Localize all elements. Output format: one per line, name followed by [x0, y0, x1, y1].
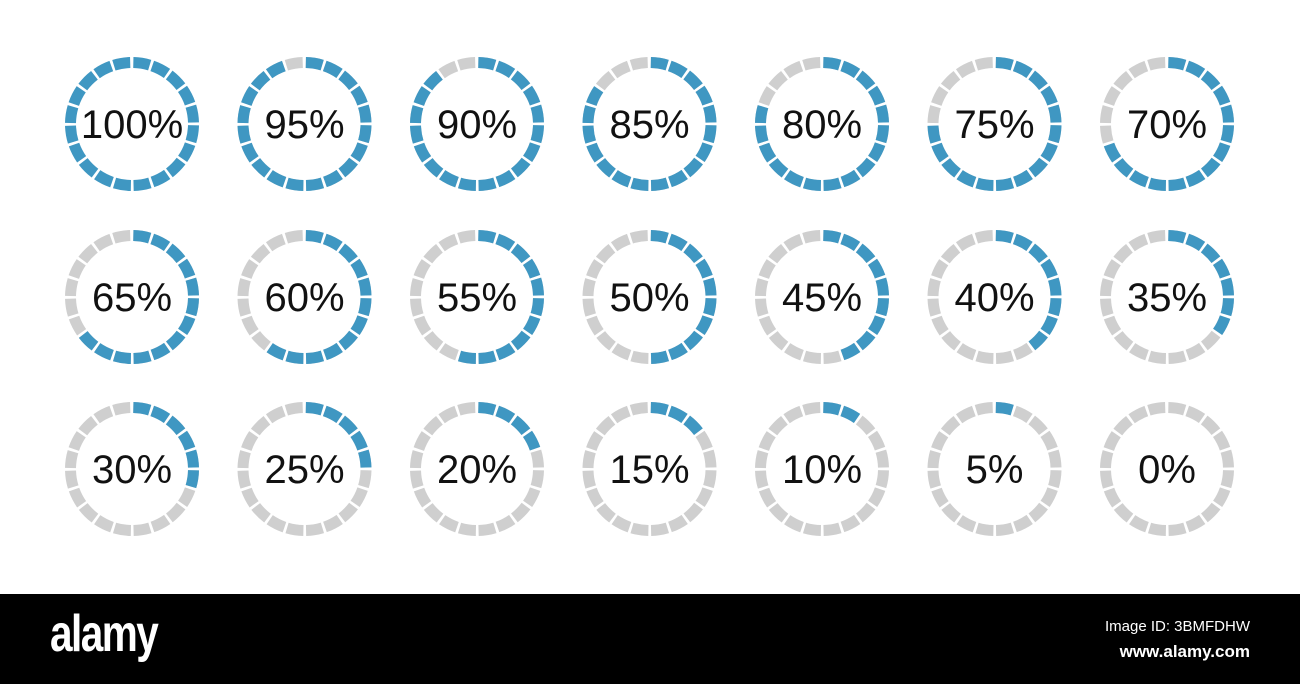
ring: 95%	[243, 62, 366, 186]
ring: 25%: 25%	[264, 448, 345, 492]
ring: 90%	[416, 62, 538, 186]
logo: alamy: alamy	[50, 605, 157, 663]
ring: 50%: 50%	[609, 276, 690, 320]
ring: 85%	[588, 62, 711, 186]
ring: 0%	[1106, 408, 1228, 530]
ring: 20%	[416, 408, 538, 530]
ring: 70%: 70%	[1127, 103, 1207, 147]
ring: 95%: 95%	[264, 103, 345, 147]
ring: 55%	[416, 236, 538, 358]
ring: 10%: 10%	[782, 448, 862, 492]
ring: 45%: 45%	[782, 276, 862, 320]
ring: 80%: 80%	[782, 103, 862, 147]
ring: 85%: 85%	[609, 103, 690, 147]
ring: 65%: 65%	[92, 276, 172, 320]
ring: 40%: 40%	[954, 276, 1035, 320]
ring: 15%	[588, 408, 711, 530]
ring: 45%	[760, 236, 884, 358]
ring: 35%	[1106, 236, 1228, 358]
ring: 70%	[1106, 62, 1228, 186]
ring: 60%: 60%	[264, 276, 345, 320]
ring: 80%	[760, 62, 884, 186]
ring: 30%: 30%	[92, 448, 172, 492]
footer bar	[0, 594, 1300, 684]
ring: 75%: 75%	[954, 103, 1035, 147]
ring: 25%	[243, 408, 366, 530]
ring: 65%	[70, 236, 194, 358]
ring: 100%	[70, 62, 194, 186]
ring: 55%: 55%	[437, 276, 517, 320]
text: image id: Image ID: 3BMFDHW	[1105, 618, 1250, 635]
text: website: www.alamy.com	[1120, 642, 1250, 661]
ring: 10%	[760, 408, 884, 530]
ring: 40%	[933, 236, 1056, 358]
ring: 5%	[933, 408, 1056, 530]
ring: 60%	[243, 236, 366, 358]
ring: 90%: 90%	[437, 103, 517, 147]
ring: 0%: 0%	[1138, 448, 1196, 492]
ring: 100%: 100%	[81, 103, 183, 147]
ring: 35%: 35%	[1127, 276, 1207, 320]
ring: 75%	[933, 62, 1056, 186]
ring: 5%: 5%	[966, 448, 1023, 492]
ring: 50%	[588, 236, 711, 358]
ring: 20%: 20%	[437, 448, 517, 492]
ring: 15%: 15%	[609, 448, 690, 492]
ring: 30%	[70, 408, 194, 530]
